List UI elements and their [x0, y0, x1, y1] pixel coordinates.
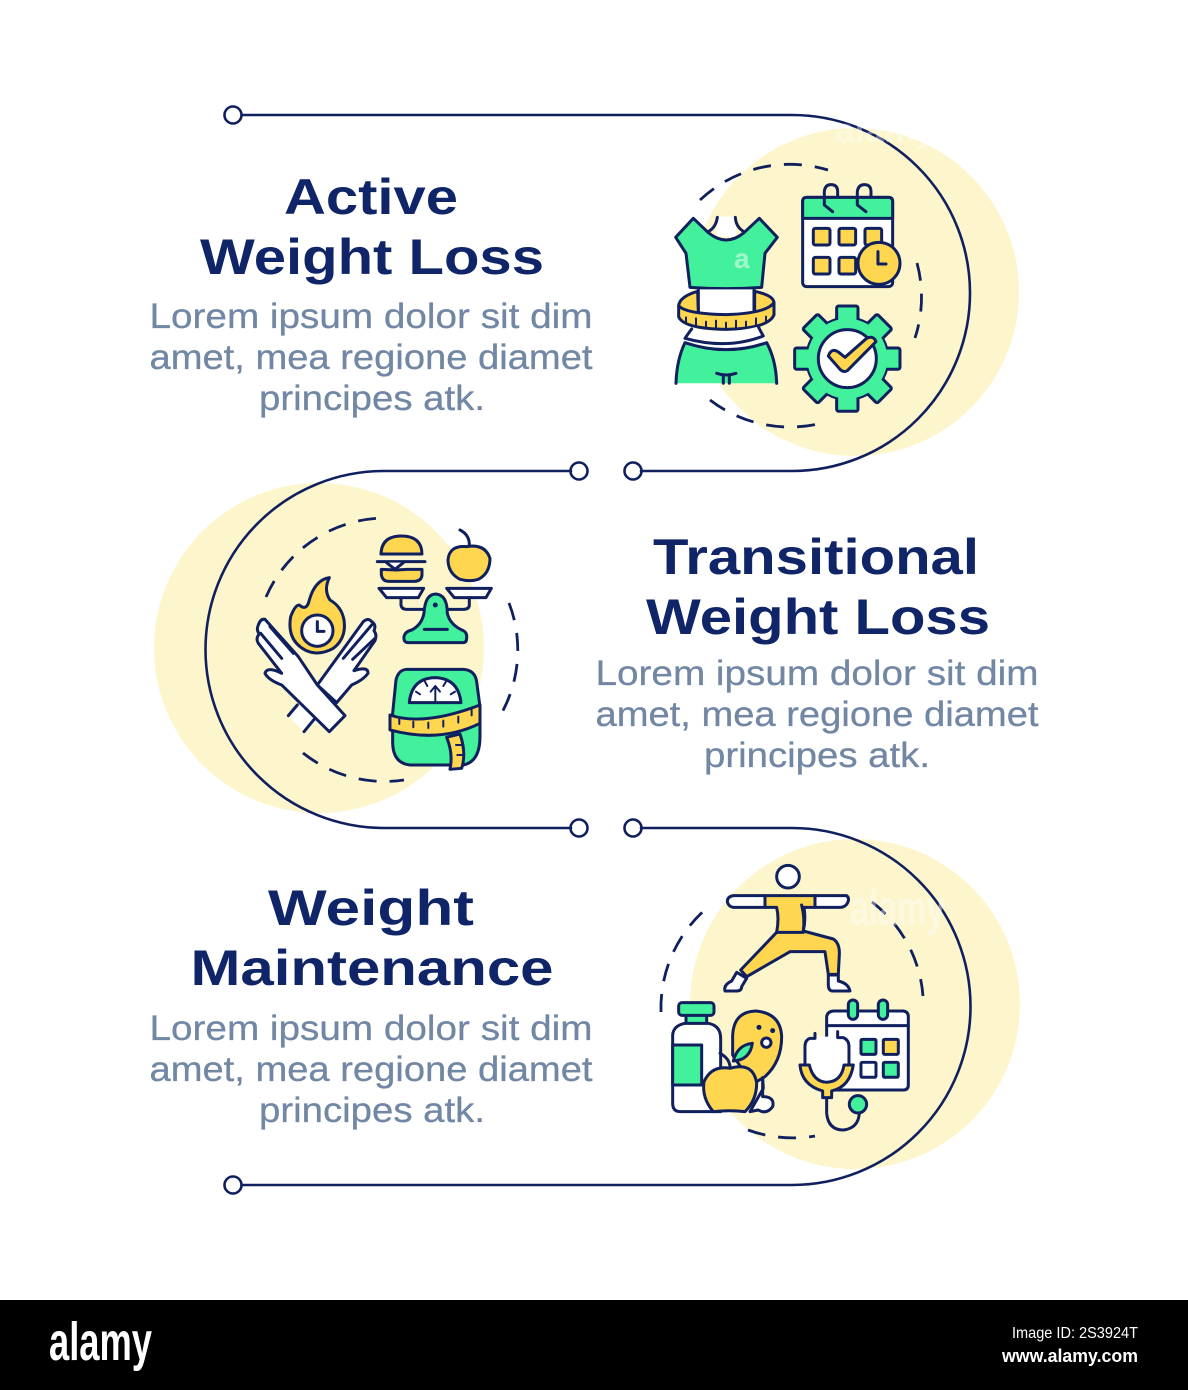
body text 1: Lorem ipsum dolor sit dim: [150, 297, 592, 336]
yellow backdrop circle 1: [691, 128, 1019, 456]
icon: burger versus apple on balance: [377, 530, 491, 643]
watermarks: alamy: [850, 880, 945, 936]
watermarks: [734, 112, 945, 936]
dashed ring 2: [266, 518, 518, 781]
body text 1: principes atk.: [259, 379, 485, 418]
body text 3: [150, 1009, 593, 1130]
icon: body with waist tape: [676, 217, 777, 383]
body text 3: principes atk.: [259, 1091, 485, 1130]
connector line 2: [206, 462, 588, 836]
dashed ring 3: [661, 902, 923, 1138]
icon: calendar with stethoscope: [800, 1000, 908, 1130]
image id: Image ID: 2S3924T: [1012, 1325, 1138, 1342]
heading: weight maintenance: [190, 880, 554, 996]
panel: transitional weight loss: [154, 462, 1039, 836]
icon: gear with check mark: [795, 306, 900, 411]
body text 2: [596, 654, 1039, 775]
body text 2: principes atk.: [704, 736, 930, 775]
icon: crossed hands with timed flame: [257, 578, 376, 732]
body text 2: Lorem ipsum dolor sit dim: [596, 654, 1038, 693]
watermarks: alamy: [835, 112, 935, 150]
panel: active weight loss: [150, 106, 1019, 480]
website: www.alamy.com: [1001, 1346, 1138, 1366]
panel: weight maintenance: [150, 820, 1020, 1194]
body text 1: [150, 297, 593, 418]
icon: supplement bottle, drumstick and apple: [673, 1003, 782, 1112]
heading: weight maintenance: Maintenance: [190, 940, 554, 996]
heading: weight maintenance: Weight: [268, 880, 474, 936]
yellow backdrop circle 3: [690, 839, 1020, 1169]
icon: bathroom scale with tape: [390, 669, 480, 769]
body text 2: amet, mea regione diamet: [596, 695, 1039, 734]
dashed ring 1: [700, 164, 922, 427]
footer bar: [0, 1300, 1188, 1390]
icon: calendar with clock: [803, 185, 900, 287]
body text 3: amet, mea regione diamet: [150, 1050, 593, 1089]
heading: active weight loss: Active: [284, 169, 458, 225]
body text 1: amet, mea regione diamet: [150, 338, 593, 377]
heading: transitional weight loss: [646, 529, 990, 645]
yellow backdrop circle 2: [154, 483, 484, 813]
body text 3: Lorem ipsum dolor sit dim: [150, 1009, 592, 1048]
footer logo: alamy: [49, 1312, 152, 1372]
heading: active weight loss: Weight Loss: [200, 229, 544, 285]
heading: transitional weight loss: Weight Loss: [646, 589, 990, 645]
icon: yoga warrior pose: [725, 865, 850, 991]
watermarks: a: [734, 243, 750, 274]
heading: active weight loss: [200, 169, 544, 285]
connector line 1: [224, 106, 970, 480]
connector line 3: [224, 820, 971, 1194]
heading: transitional weight loss: Transitional: [653, 529, 979, 585]
